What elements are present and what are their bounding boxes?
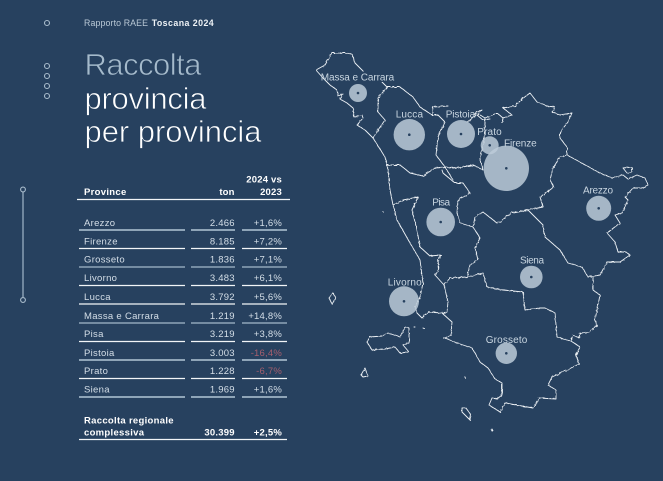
- bubble: Pisa: [426, 208, 455, 236]
- map labels: Siena: [520, 256, 544, 267]
- decorative marker: top circle: [44, 20, 50, 26]
- row: Prato: -6,7%: [256, 366, 282, 377]
- table: raccolta per provincia: [77, 175, 290, 439]
- map labels: [321, 73, 613, 346]
- bubble: Pistoia: [447, 120, 475, 148]
- map labels: Arezzo: [583, 186, 613, 197]
- map labels: Lucca: [396, 110, 423, 121]
- row: Lucca: Lucca: [84, 292, 111, 303]
- row: Lucca: [79, 292, 287, 304]
- row: Pisa: Pisa: [84, 329, 104, 340]
- row: Livorno: 3.483: [210, 273, 235, 284]
- row: Siena: +1,6%: [254, 385, 282, 396]
- row: Pisa: +3,8%: [254, 329, 282, 340]
- row: Firenze: [79, 236, 287, 248]
- map labels: Massa e Carrara: [321, 73, 395, 84]
- row: Arezzo: [79, 218, 287, 230]
- row: Massa e Carrara: [79, 311, 287, 323]
- row: Pistoia: -16,4%: [251, 348, 282, 359]
- row: Lucca: +5,6%: [254, 292, 282, 303]
- bubble: Massa e Carrara: [349, 84, 367, 102]
- row: Prato: 1.228: [210, 366, 235, 377]
- map labels: Grosseto: [486, 335, 528, 346]
- row: total: [79, 415, 287, 440]
- row: Siena: 1.969: [210, 385, 235, 396]
- table header: [77, 175, 290, 200]
- table header: ton: [219, 187, 235, 198]
- title: [84, 47, 262, 149]
- row: Pistoia: Pistoia: [84, 348, 115, 359]
- row: Livorno: Livorno: [84, 273, 117, 284]
- row: total: 30.399: [204, 427, 235, 438]
- province borders: [316, 53, 648, 412]
- row: Pistoia: 3.003: [210, 348, 235, 359]
- bubble: Lucca: [394, 119, 425, 150]
- row: Pistoia: [79, 348, 287, 360]
- bubble: Prato: [481, 136, 499, 154]
- title: per provincia: [84, 114, 262, 149]
- decorative markers: four circles: [44, 64, 50, 98]
- map labels: Pisa: [432, 197, 450, 208]
- row: Massa e Carrara: +14,8%: [248, 311, 282, 322]
- bubble: Arezzo: [586, 196, 611, 221]
- table header: 2024 vs: [246, 175, 282, 186]
- table header: 2023: [260, 187, 282, 198]
- row: Siena: Siena: [84, 385, 110, 396]
- row: total: complessiva: [84, 427, 145, 438]
- vertical timeline marker: [21, 187, 25, 302]
- table header: Province: [84, 187, 127, 198]
- bubble: Livorno: [389, 286, 419, 316]
- row: Arezzo: +1,6%: [254, 218, 282, 229]
- bubble: Grosseto: [496, 343, 517, 364]
- row: Prato: Prato: [84, 366, 108, 377]
- row: Prato: [79, 366, 287, 378]
- report header: Rapporto RAEE: [84, 18, 148, 28]
- map of Tuscany provinces: [316, 53, 648, 431]
- row: Massa e Carrara: 1.219: [210, 311, 235, 322]
- row: Siena: [79, 385, 287, 397]
- row: Pisa: 3.219: [210, 329, 235, 340]
- row: Arezzo: Arezzo: [84, 218, 115, 229]
- row: Grosseto: [79, 255, 287, 267]
- map labels: Livorno: [388, 278, 422, 289]
- bubble: Siena: [520, 266, 543, 288]
- row: Grosseto: 1.836: [210, 255, 235, 266]
- title: provincia: [84, 81, 207, 116]
- row: Grosseto: Grosseto: [84, 255, 125, 266]
- row: Massa e Carrara: Massa e Carrara: [84, 311, 160, 322]
- report header: Toscana 2024: [152, 18, 214, 28]
- islands: [329, 212, 493, 431]
- map labels: Pistoia: [446, 110, 476, 121]
- row: Firenze: Firenze: [84, 236, 118, 247]
- row: Firenze: +7,2%: [254, 236, 282, 247]
- row: Lucca: 3.792: [210, 292, 235, 303]
- title: Raccolta: [84, 47, 202, 82]
- row: Livorno: [79, 273, 287, 286]
- map labels: Firenze: [504, 139, 537, 150]
- row: Firenze: 8.185: [210, 236, 235, 247]
- row: Pisa: [79, 329, 287, 342]
- row: Grosseto: +7,1%: [254, 255, 282, 266]
- row: Livorno: +6,1%: [254, 273, 282, 284]
- row: total: +2,5%: [254, 427, 282, 438]
- row: total: Raccolta regionale: [84, 415, 174, 426]
- row: Arezzo: 2.466: [210, 218, 235, 229]
- bubble: Firenze: [484, 146, 529, 191]
- map labels: Prato: [477, 127, 502, 138]
